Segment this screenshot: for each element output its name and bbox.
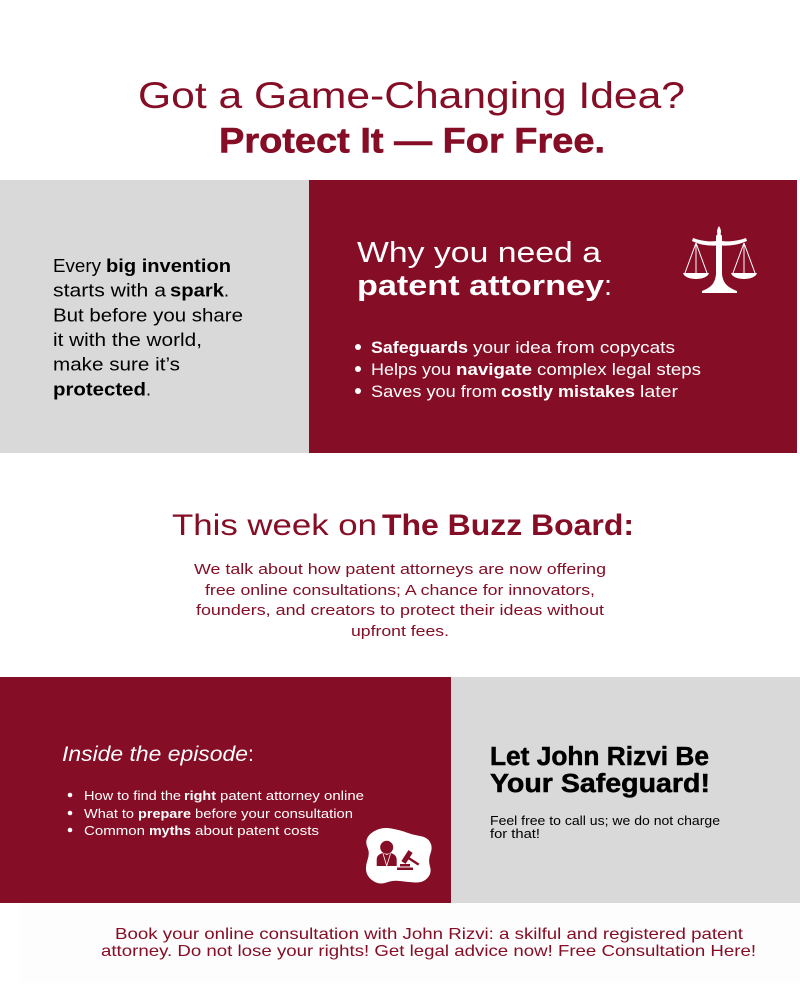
panel: big invention intro: make sure it’s	[53, 355, 180, 375]
panel: why you need a patent attorney	[0, 0, 797, 453]
title: Got a Game-Changing Idea?	[138, 75, 685, 116]
panel: inside the episode	[0, 0, 451, 903]
list: episode topics: about patent costs	[195, 823, 320, 838]
heading: why you need a patent attorney: :	[604, 270, 612, 302]
text block: buzz board description: We talk about how patent attorneys are now offering	[194, 561, 606, 578]
heading: why you need a patent attorney: Why you need a	[357, 237, 602, 269]
list: episode topics: prepare	[138, 806, 191, 821]
heading: call to action: Let John Rizvi Be	[490, 743, 709, 771]
panel: booking banner: Book your online consultation with John Rizvi: a skilful and registered patent	[115, 926, 744, 943]
heading: inside the episode: Inside the episode	[62, 743, 248, 766]
panel: big invention intro: it with the world,	[53, 330, 202, 350]
panel: big invention intro: But before you share	[53, 305, 243, 325]
panel: big invention intro: spark	[170, 281, 225, 301]
list: episode topics	[0, 0, 368, 838]
icon: attorney with gavel	[366, 828, 432, 884]
list: episode topics: patent attorney online	[220, 788, 364, 803]
list: episode topics: before your consultation	[195, 806, 353, 821]
text block: buzz board description: founders, and creators to protect their ideas without	[196, 602, 605, 619]
list: reasons: later	[640, 383, 679, 401]
heading: why you need a patent attorney: patent attorney	[357, 270, 604, 302]
panel: booking banner: attorney. Do not lose your rights! Get legal advice now! Free Consultation Here!	[101, 943, 756, 960]
list: reasons: Helps you	[371, 361, 451, 379]
text block: free call note: Feel free to call us; we do not charge	[490, 814, 720, 828]
panel: big invention intro	[0, 0, 309, 453]
icon: scales of justice	[683, 226, 757, 293]
list: episode topics: How to find the	[84, 788, 181, 803]
text block: free call note: for that!	[490, 827, 540, 841]
title: Protect It — For Free.	[219, 120, 605, 160]
heading: this week on the buzz board: The Buzz Board:	[382, 509, 634, 542]
list: reasons: Safeguards	[371, 339, 468, 357]
panel: big invention intro: .	[224, 281, 229, 301]
heading: call to action: Your Safeguard!	[490, 770, 710, 798]
list: episode topics: right	[184, 788, 217, 803]
list: episode topics: Common	[84, 823, 145, 838]
list: reasons: navigate	[456, 361, 532, 379]
list: episode topics: myths	[149, 823, 191, 838]
panel: big invention intro: big invention	[106, 256, 231, 276]
list: episode topics: What to	[84, 806, 134, 821]
panel: big invention intro: starts with a	[53, 281, 167, 301]
list: reasons	[0, 0, 706, 401]
panel: big invention intro: .	[146, 380, 151, 400]
list: reasons: costly mistakes	[501, 383, 635, 401]
title	[138, 75, 685, 160]
list: reasons: your idea from copycats	[473, 339, 675, 357]
heading: this week on the buzz board: This week on	[172, 509, 377, 542]
list: reasons: complex legal steps	[537, 361, 701, 379]
panel: big invention intro: Every	[53, 256, 101, 276]
text block: buzz board description: free online consultations; A chance for innovators,	[205, 582, 595, 599]
panel: big invention intro: protected	[53, 380, 146, 400]
heading: inside the episode: :	[248, 743, 254, 766]
text block: buzz board description: upfront fees.	[351, 623, 449, 640]
list: reasons: Saves you from	[371, 383, 497, 401]
